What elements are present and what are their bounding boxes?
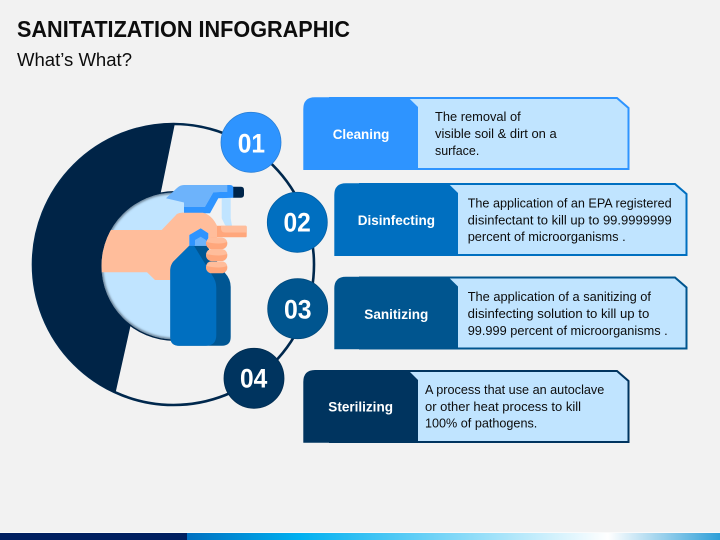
badge 04 <box>224 348 284 408</box>
description <box>468 289 668 338</box>
footer bar <box>0 532 720 540</box>
description: 100% of pathogens. <box>425 416 537 431</box>
panel: sanitizing <box>334 277 686 349</box>
ring with dark crescent <box>33 123 314 405</box>
bottle collar <box>189 228 208 246</box>
finger 3 <box>206 262 227 273</box>
label: Cleaning <box>333 126 389 142</box>
index finger <box>217 226 247 237</box>
badge 02: 02 <box>284 208 311 238</box>
panel: cleaning <box>303 97 628 170</box>
label: Sanitizing <box>364 306 428 322</box>
description: The application of an EPA registered <box>468 195 672 210</box>
nozzle tip <box>233 187 244 198</box>
description: disinfecting solution to kill up to <box>468 306 649 321</box>
finger 1 top <box>206 238 227 244</box>
subtitle: What’s What? <box>17 49 132 70</box>
icon: hand holding spray bottle <box>100 185 247 346</box>
finger 2 <box>206 249 227 261</box>
description: percent of microorganisms . <box>468 229 626 244</box>
arm and palm <box>100 213 217 280</box>
finger 2 top <box>206 249 227 256</box>
description: visible soil & dirt on a <box>435 126 557 141</box>
sprayer head <box>166 185 228 207</box>
badge 02 <box>267 192 327 252</box>
badge 04: 04 <box>240 364 267 394</box>
bottle back <box>170 246 231 346</box>
badge 03: 03 <box>284 294 312 324</box>
badge 03 <box>268 279 328 339</box>
hand top over neck <box>172 213 217 234</box>
description: surface. <box>435 143 479 158</box>
title: SANITATIZATION INFOGRAPHIC <box>17 16 350 42</box>
finger 3 top <box>206 262 227 268</box>
description <box>425 382 604 431</box>
sprayer trigger <box>222 198 233 230</box>
description: or other heat process to kill <box>425 399 581 414</box>
description: 99.999 percent of microorganisms . <box>468 323 668 338</box>
finger 1 <box>206 238 227 249</box>
description <box>468 195 672 244</box>
collar highlight <box>195 237 206 246</box>
description: disinfectant to kill up to 99.9999999 <box>468 212 672 227</box>
description: The application of a sanitizing of <box>468 289 651 304</box>
sprayer neck <box>184 185 233 213</box>
label: Disinfecting <box>358 212 435 228</box>
panel: sterilizing <box>303 370 628 443</box>
panel: disinfecting <box>334 183 686 256</box>
badge 01: 01 <box>238 128 265 158</box>
description: The removal of <box>435 109 521 124</box>
label: Sterilizing <box>328 399 393 415</box>
badge 01 <box>221 112 281 172</box>
bottle front <box>170 246 216 346</box>
description: A process that use an autoclave <box>425 382 604 397</box>
description <box>435 109 557 158</box>
